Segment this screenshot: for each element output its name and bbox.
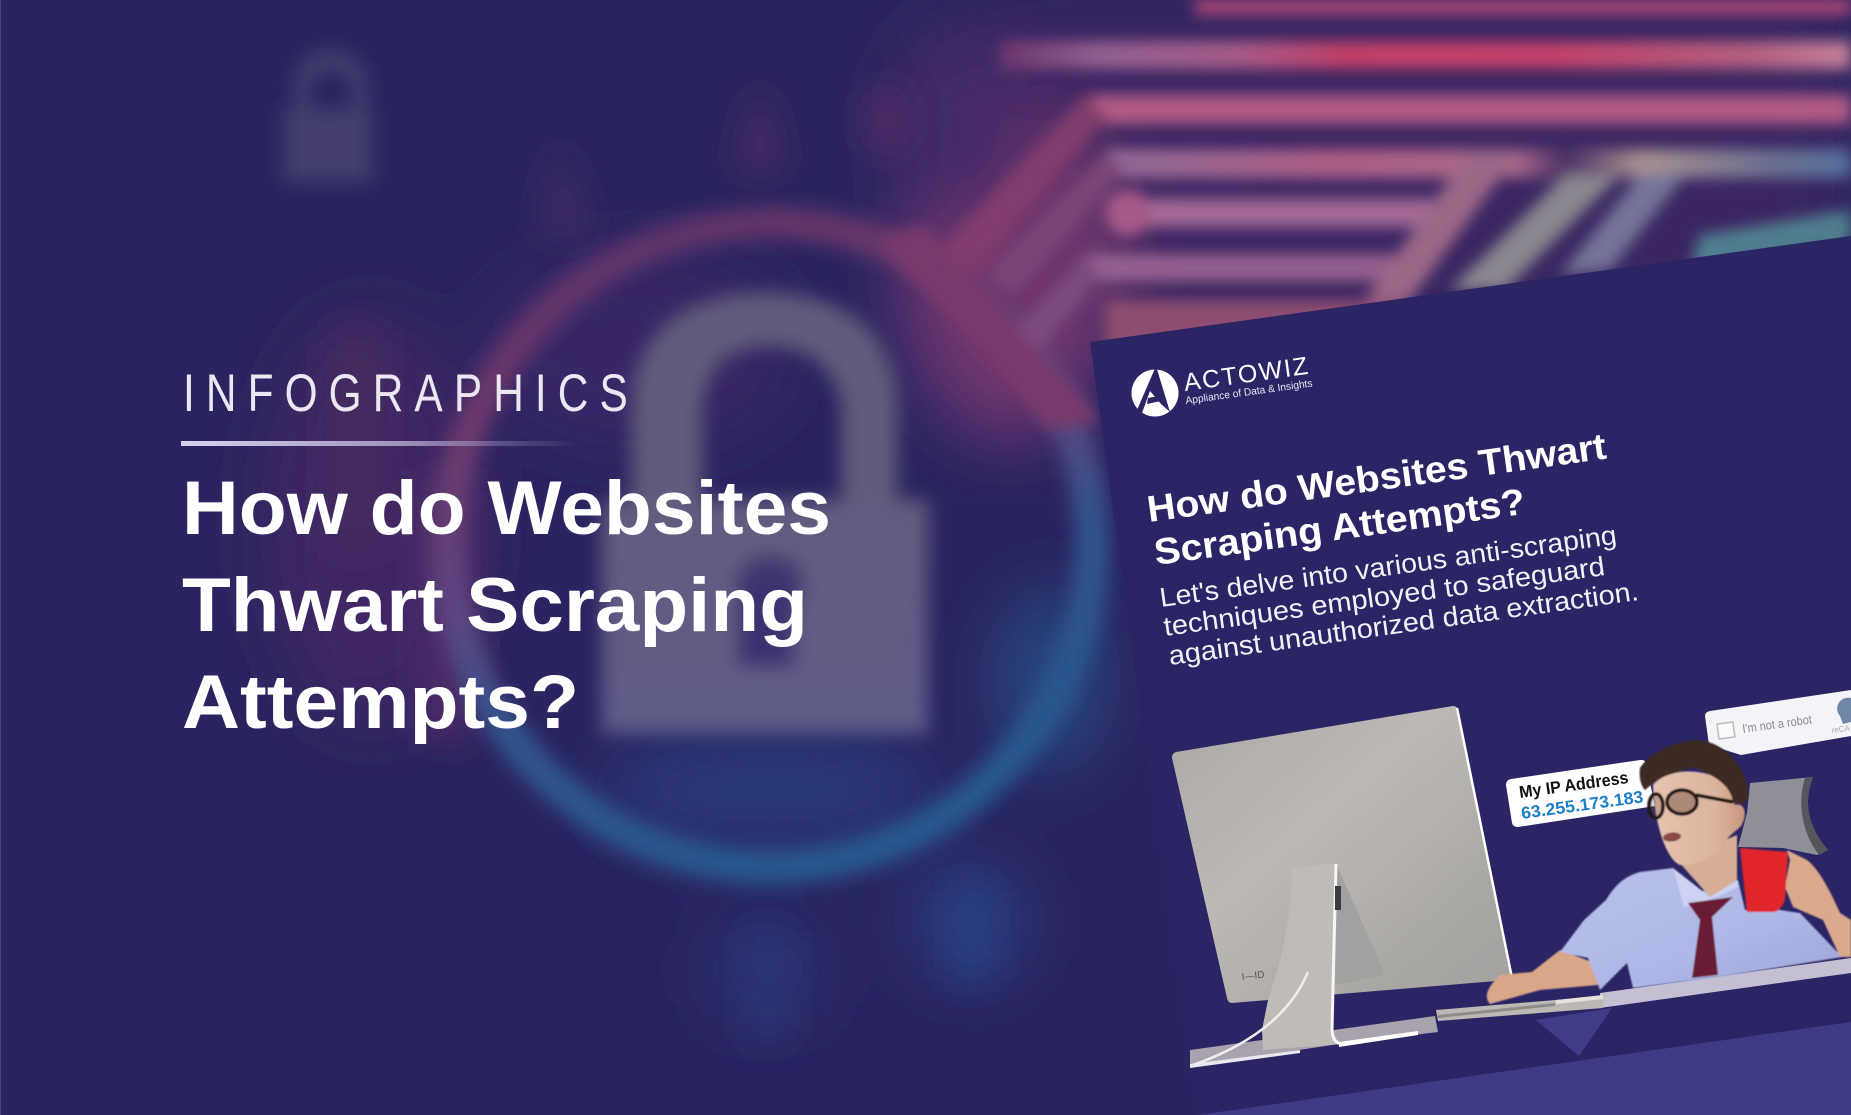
small padlock [284,50,372,182]
card body [1705,690,1851,755]
panel title: How do Websites Thwart [1144,426,1609,530]
office chair [1738,777,1828,855]
panel subtitle [1158,520,1640,671]
circuit traces [880,0,1851,430]
ip number: 63.255.173.183 [1520,787,1644,823]
stand shadow [1335,863,1385,985]
collar [1673,850,1738,907]
image edge hairlines [0,0,1,1115]
main title: Thwart Scraping [182,563,808,648]
left heading block [181,365,831,745]
right hand and forearm [1785,850,1851,957]
hair [1640,740,1749,804]
shirt [1560,868,1842,990]
man with mug [1487,740,1851,1004]
captcha label: I'm not a robot [1741,712,1813,736]
checkbox [1717,722,1735,739]
power cable [1193,972,1308,1065]
tie [1688,897,1733,978]
vent [1335,886,1341,910]
logo [1132,352,1313,416]
circular ring [448,223,1092,867]
tagline: Appliance of Data & Insights [1185,377,1313,407]
tilted infographic preview panel [1090,236,1851,1115]
desk [1190,958,1851,1068]
triangle pointer [1536,1008,1612,1056]
panel subtitle: techniques employed to safeguard [1162,551,1607,642]
computer monitor [1172,706,1512,1065]
wordmark: ACTOWIZ [1182,352,1310,397]
stand edge [1332,864,1343,1044]
blurred background marks [330,80,989,1040]
IP address bubble [1506,760,1655,827]
main title: Attempts? [182,660,579,745]
mouth [1663,832,1681,842]
large padlock [602,293,928,733]
recaptcha icon [1837,698,1851,724]
recaptcha text: reCA [1831,723,1851,735]
panel title [1144,426,1609,573]
keyboard [1436,995,1603,1021]
panel background [1090,236,1851,1115]
main title [182,466,831,745]
main title: How do Websites [182,466,831,551]
label: infographics: INFOGRAPHICS [183,365,628,423]
monitor highlight edge [1457,708,1512,978]
panel subtitle: Let's delve into various anti-scraping [1158,520,1618,613]
glasses [1649,790,1733,818]
bubble [1506,760,1655,827]
forearm and hand [1487,950,1598,1004]
lighter bottom band [1198,1022,1851,1115]
face [1653,771,1745,865]
neck [1677,835,1737,897]
red mug [1740,848,1788,912]
ip label: My IP Address [1518,768,1630,802]
logo mark [1132,366,1178,416]
monitor back [1172,706,1512,1003]
panel title: Scraping Attempts? [1151,481,1528,573]
underline rule [181,441,581,446]
rear label: I—ID [1241,970,1265,983]
captcha card [1705,690,1851,755]
colour glows [260,0,1851,1020]
stand [1262,863,1342,1050]
panel subtitle: against unauthorized data extraction. [1167,576,1640,671]
